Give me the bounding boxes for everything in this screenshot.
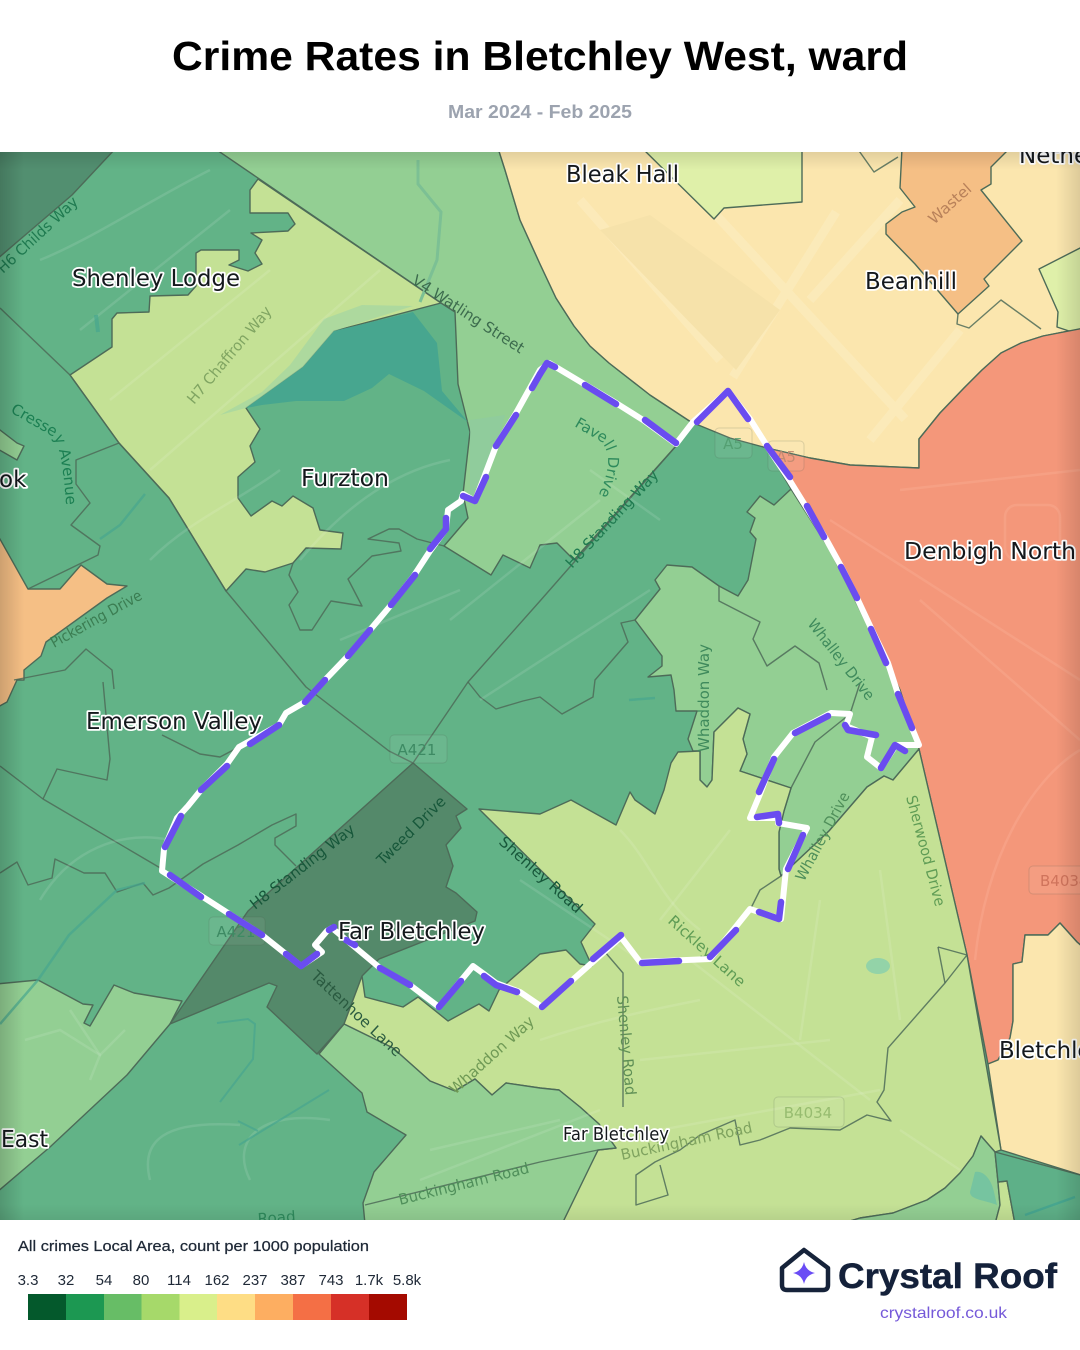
road labels: Tweed Drive (372, 792, 449, 870)
area: red Denbigh North (767, 328, 1080, 1064)
area: top-left dark corner (0, 148, 116, 260)
ward boundary: white line (162, 363, 919, 1007)
road labels: Shenley Road (613, 995, 640, 1096)
road labels: Whalley Drive (792, 789, 854, 884)
icon: crystal star (793, 1262, 815, 1284)
pond: east (866, 958, 890, 974)
place labels: East (1, 1127, 48, 1153)
boundaries and roads (0, 308, 967, 1205)
road labels: H8 Standing Way (562, 466, 662, 572)
area: yellow Bleak Hall and Beanhill (498, 148, 1080, 468)
legend scale labels: 5.8k (393, 1272, 422, 1289)
area: H7 Chaffron light green (70, 179, 441, 591)
place labels: Bleak Hall (566, 162, 679, 188)
road labels: H8 Standing Way (246, 820, 358, 913)
road labels: Rickley Lane (664, 912, 749, 991)
water: upper stream (418, 160, 441, 302)
feature: red region streets (830, 470, 1080, 960)
area: main light green Far Bletchley south (344, 708, 1001, 1224)
road labels: Buckingham Road (397, 1159, 531, 1209)
legend scale labels (18, 1272, 422, 1289)
feature: outline north of Wastel (859, 152, 898, 173)
road labels: Favell Drive (575, 417, 620, 496)
place labels: Shenley Lodge (72, 266, 240, 292)
legend scale labels: 237 (242, 1272, 268, 1289)
place labels: Far Bletchley (338, 919, 485, 945)
area: south-west mid-green (0, 980, 182, 1193)
legend scale labels: 162 (204, 1272, 230, 1289)
road labels: Wastel (925, 180, 975, 228)
area: orange west (0, 532, 127, 708)
map base: medium green areas (0, 152, 1080, 1220)
streets: faint road network (25, 170, 960, 1180)
legend colour bar (28, 1294, 407, 1320)
place labels: Far Bletchley (563, 1125, 669, 1145)
road labels: Pickering Drive (47, 586, 145, 651)
place labels: Denbigh North (904, 539, 1076, 565)
feature: south-east pond (970, 1172, 997, 1205)
road labels: Shenley Road (495, 833, 586, 917)
legend scale labels: 114 (167, 1272, 191, 1289)
legend scale labels: 387 (280, 1272, 306, 1289)
area: pale green top right (1039, 246, 1080, 332)
legend (18, 1238, 422, 1320)
area: Whalley mid-green (635, 489, 919, 876)
road shields: A421 (217, 923, 255, 941)
road labels: Whaddon Way (446, 1012, 538, 1098)
road labels: Whalley Drive (804, 615, 878, 704)
feature: pale lake margin (220, 305, 413, 415)
legend scale labels: 3.3 (18, 1272, 38, 1289)
place labels: Beanhill (865, 269, 957, 295)
area: north mid-green including Favell Drive (214, 148, 691, 575)
road labels: Road (257, 1207, 296, 1228)
area: west small mid-green (0, 427, 24, 460)
map edge shading (0, 152, 1080, 1220)
legend scale labels: 32 (58, 1272, 74, 1289)
feature: yellow region road grid (580, 200, 960, 440)
road labels: Buckingham Road (619, 1118, 754, 1164)
area: pale green by Bleak Hall (642, 148, 802, 219)
road labels (0, 182, 972, 1268)
wordmark: Crystal Roof (838, 1257, 1057, 1296)
feature: Furzton lake (246, 312, 468, 422)
area: orange Wastel (886, 148, 1022, 314)
area: dark Far Bletchley core (170, 763, 477, 1054)
area: south-east light strip (995, 1182, 1014, 1220)
legend scale labels: 1.7k (355, 1272, 384, 1289)
feature: yellow region darker patch (600, 215, 780, 370)
area: yellow Bletchley (988, 923, 1080, 1176)
road labels: Whaddon Way (695, 644, 713, 752)
website url: crystalroof.co.uk (880, 1305, 1008, 1322)
feature: outline beneath Wastel (957, 300, 1041, 329)
road shields (209, 428, 1080, 1127)
road labels: Sherwood Drive (902, 793, 949, 908)
road shields: A5 (723, 435, 743, 453)
place labels: Emerson Valley (86, 709, 262, 735)
area: south-east medium green corner (995, 1152, 1080, 1224)
place labels (0, 143, 1080, 1153)
legend title: All crimes Local Area, count per 1000 population (18, 1238, 369, 1255)
road shields: A421 (398, 741, 436, 759)
area: south mid-green (319, 1024, 616, 1224)
area: south-east mid-green pocket (851, 1135, 1000, 1220)
road labels: H7 Chaffron Way (183, 302, 276, 408)
title: Crime Rates in Bletchley West, ward (172, 33, 908, 79)
brand logo (782, 1250, 1057, 1322)
road shields: B4034 (784, 1104, 832, 1122)
road labels: Cressey Avenue (12, 404, 74, 504)
legend scale labels: 743 (318, 1272, 344, 1289)
road labels: Tattenhoe Lane (307, 966, 406, 1060)
place labels: Furzton (301, 466, 389, 492)
ward boundary: purple dashes (165, 363, 912, 1007)
road labels: V4 Watling Street (409, 271, 528, 357)
water: south-east stream (1025, 1197, 1075, 1215)
icon: house outline (782, 1250, 828, 1290)
legend scale labels: 54 (96, 1272, 112, 1289)
legend scale labels: 80 (133, 1272, 149, 1289)
road shields: A5 (776, 448, 796, 466)
feature: Furzton lake outlet (470, 415, 505, 500)
subtitle: date range: Mar 2024 - Feb 2025 (448, 102, 632, 122)
water lines (0, 315, 655, 1145)
